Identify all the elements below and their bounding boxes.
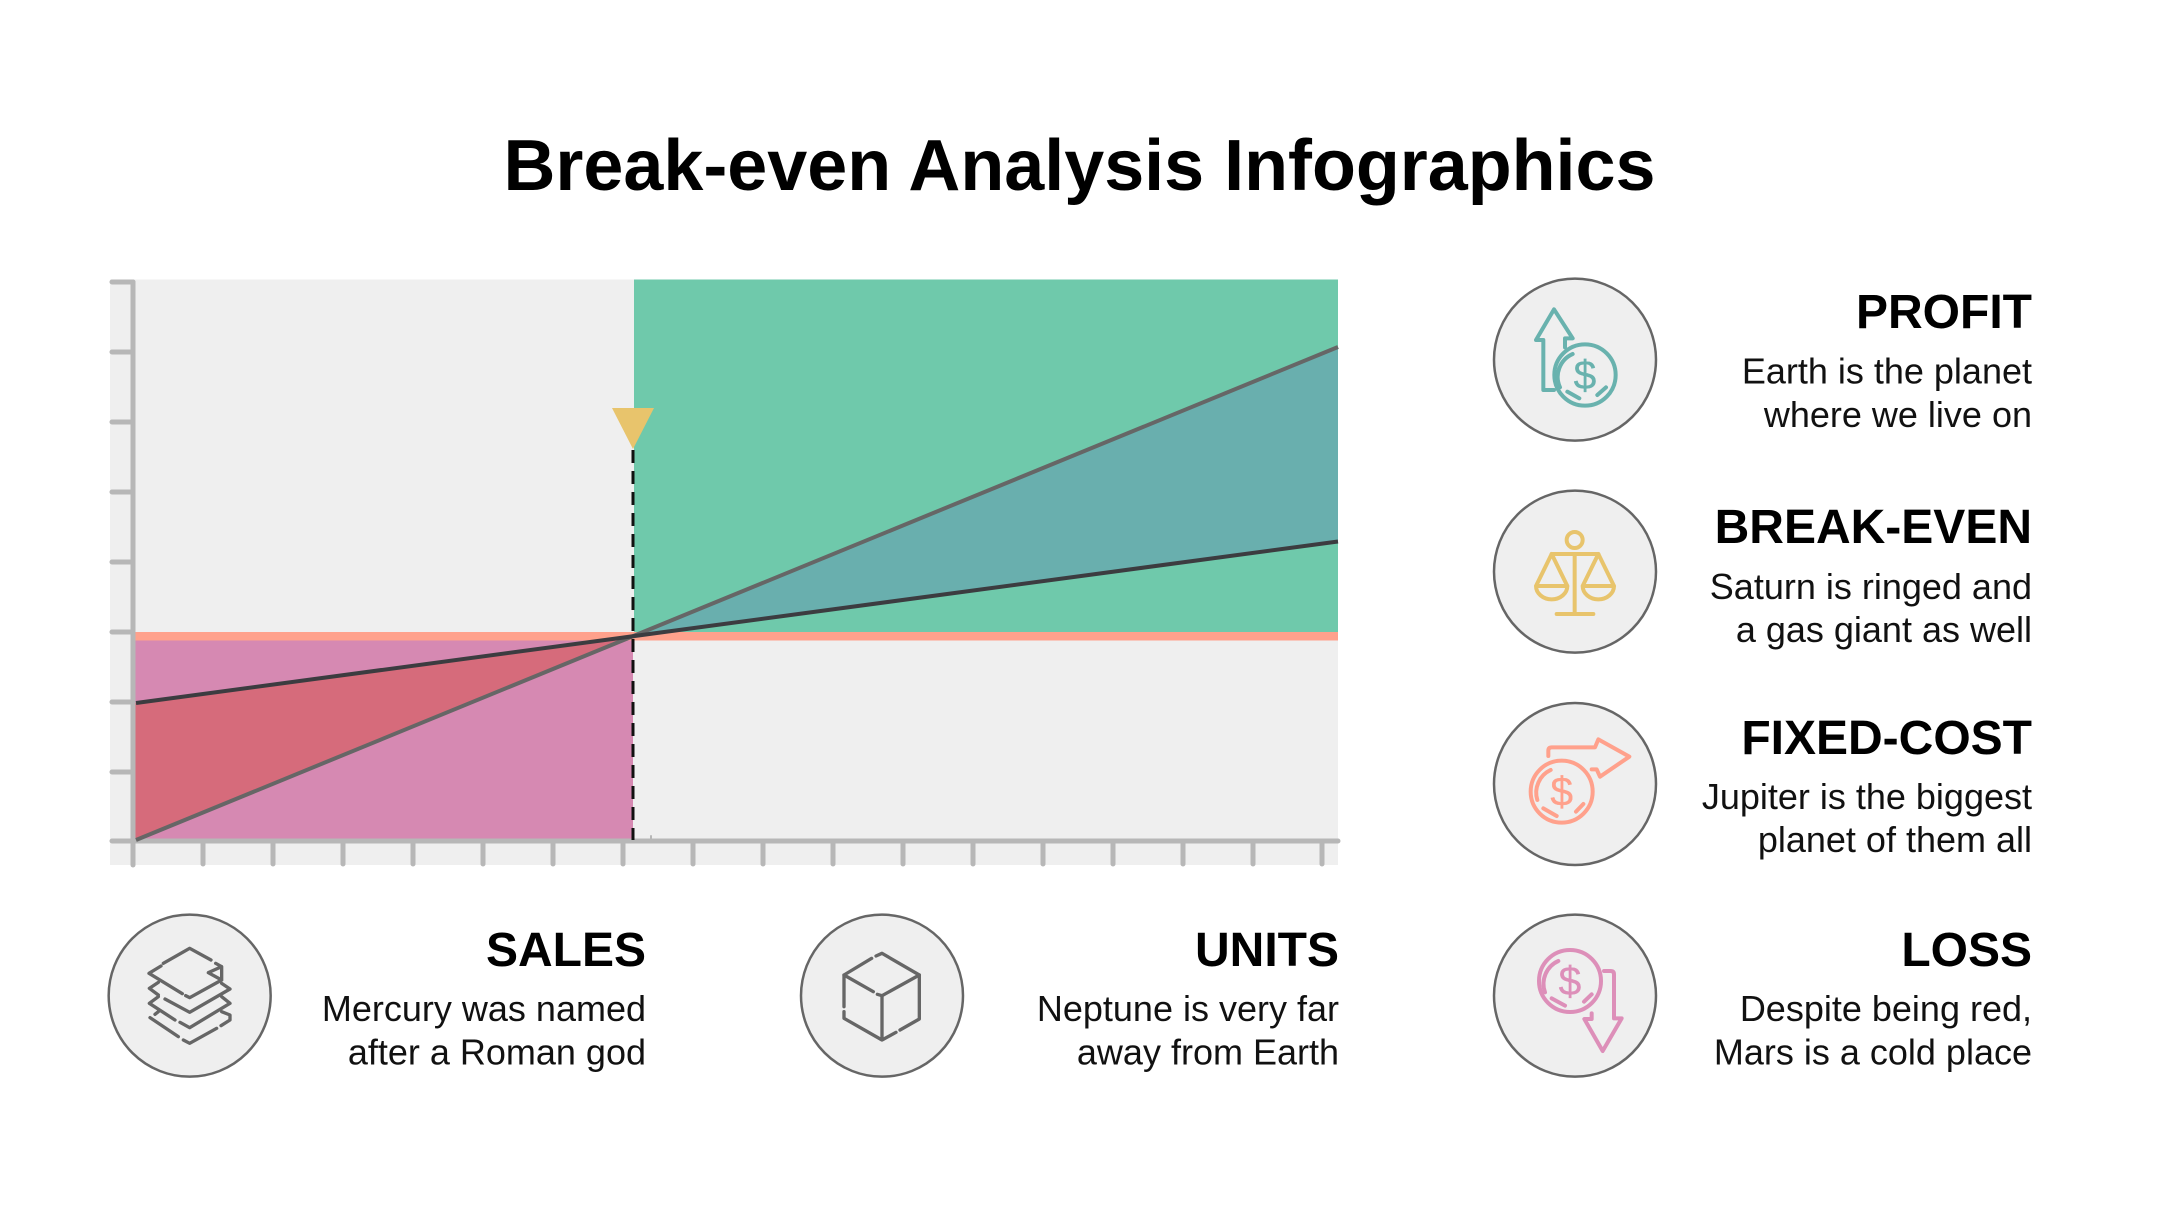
heading: UNITS: [1195, 924, 1339, 977]
description: planet of them all: [1758, 819, 2032, 860]
panel: loss: [1494, 915, 2032, 1077]
break-even dashed line: [632, 450, 634, 840]
icon: scales: [1494, 491, 1656, 653]
panel: fixed-cost: [1494, 703, 2032, 865]
description: Mercury was named: [322, 988, 646, 1029]
axes: [112, 282, 1338, 865]
icon: loss: $: [1559, 958, 1581, 1004]
description: Despite being red,: [1740, 988, 2032, 1029]
heading: FIXED-COST: [1741, 712, 2032, 765]
icon: profit: $: [1574, 352, 1596, 398]
loss wedge: [134, 636, 633, 840]
panel: sales: [109, 915, 646, 1077]
icon: loss: [1494, 915, 1656, 1077]
icon: stacked sheets: [109, 915, 271, 1077]
fixed cost band: [134, 632, 1338, 640]
description: Earth is the planet: [1742, 350, 2032, 392]
panel: profit: [1494, 279, 2032, 441]
cost line: [136, 542, 1338, 703]
heading: LOSS: [1901, 924, 2032, 977]
description: where we live on: [1763, 394, 2032, 435]
heading: BREAK-EVEN: [1715, 501, 2032, 554]
icon: cube: [801, 915, 963, 1077]
description: Saturn is ringed and: [1710, 566, 2032, 607]
loss area: [134, 640, 633, 840]
heading: PROFIT: [1856, 286, 2032, 339]
heading: SALES: [486, 924, 646, 977]
description: away from Earth: [1077, 1032, 1339, 1072]
sales line: [136, 347, 1338, 840]
break-even chart: [110, 280, 1338, 865]
profit wedge: [633, 347, 1338, 636]
description: Neptune is very far: [1037, 988, 1339, 1029]
title: Break-even Analysis Infographics: [503, 126, 1656, 206]
description: Mars is a cold place: [1714, 1032, 2032, 1072]
profit area: [634, 280, 1338, 632]
panel: units: [801, 915, 1339, 1077]
description: a gas giant as well: [1736, 609, 2032, 650]
panel: break-even: [1494, 491, 2032, 653]
icon: fixed cost: [1494, 703, 1656, 865]
break-even marker: [612, 408, 654, 449]
icon: fixed cost: $: [1550, 769, 1573, 815]
icon: profit: [1494, 279, 1656, 441]
description: Jupiter is the biggest: [1702, 776, 2032, 817]
description: after a Roman god: [348, 1032, 646, 1072]
